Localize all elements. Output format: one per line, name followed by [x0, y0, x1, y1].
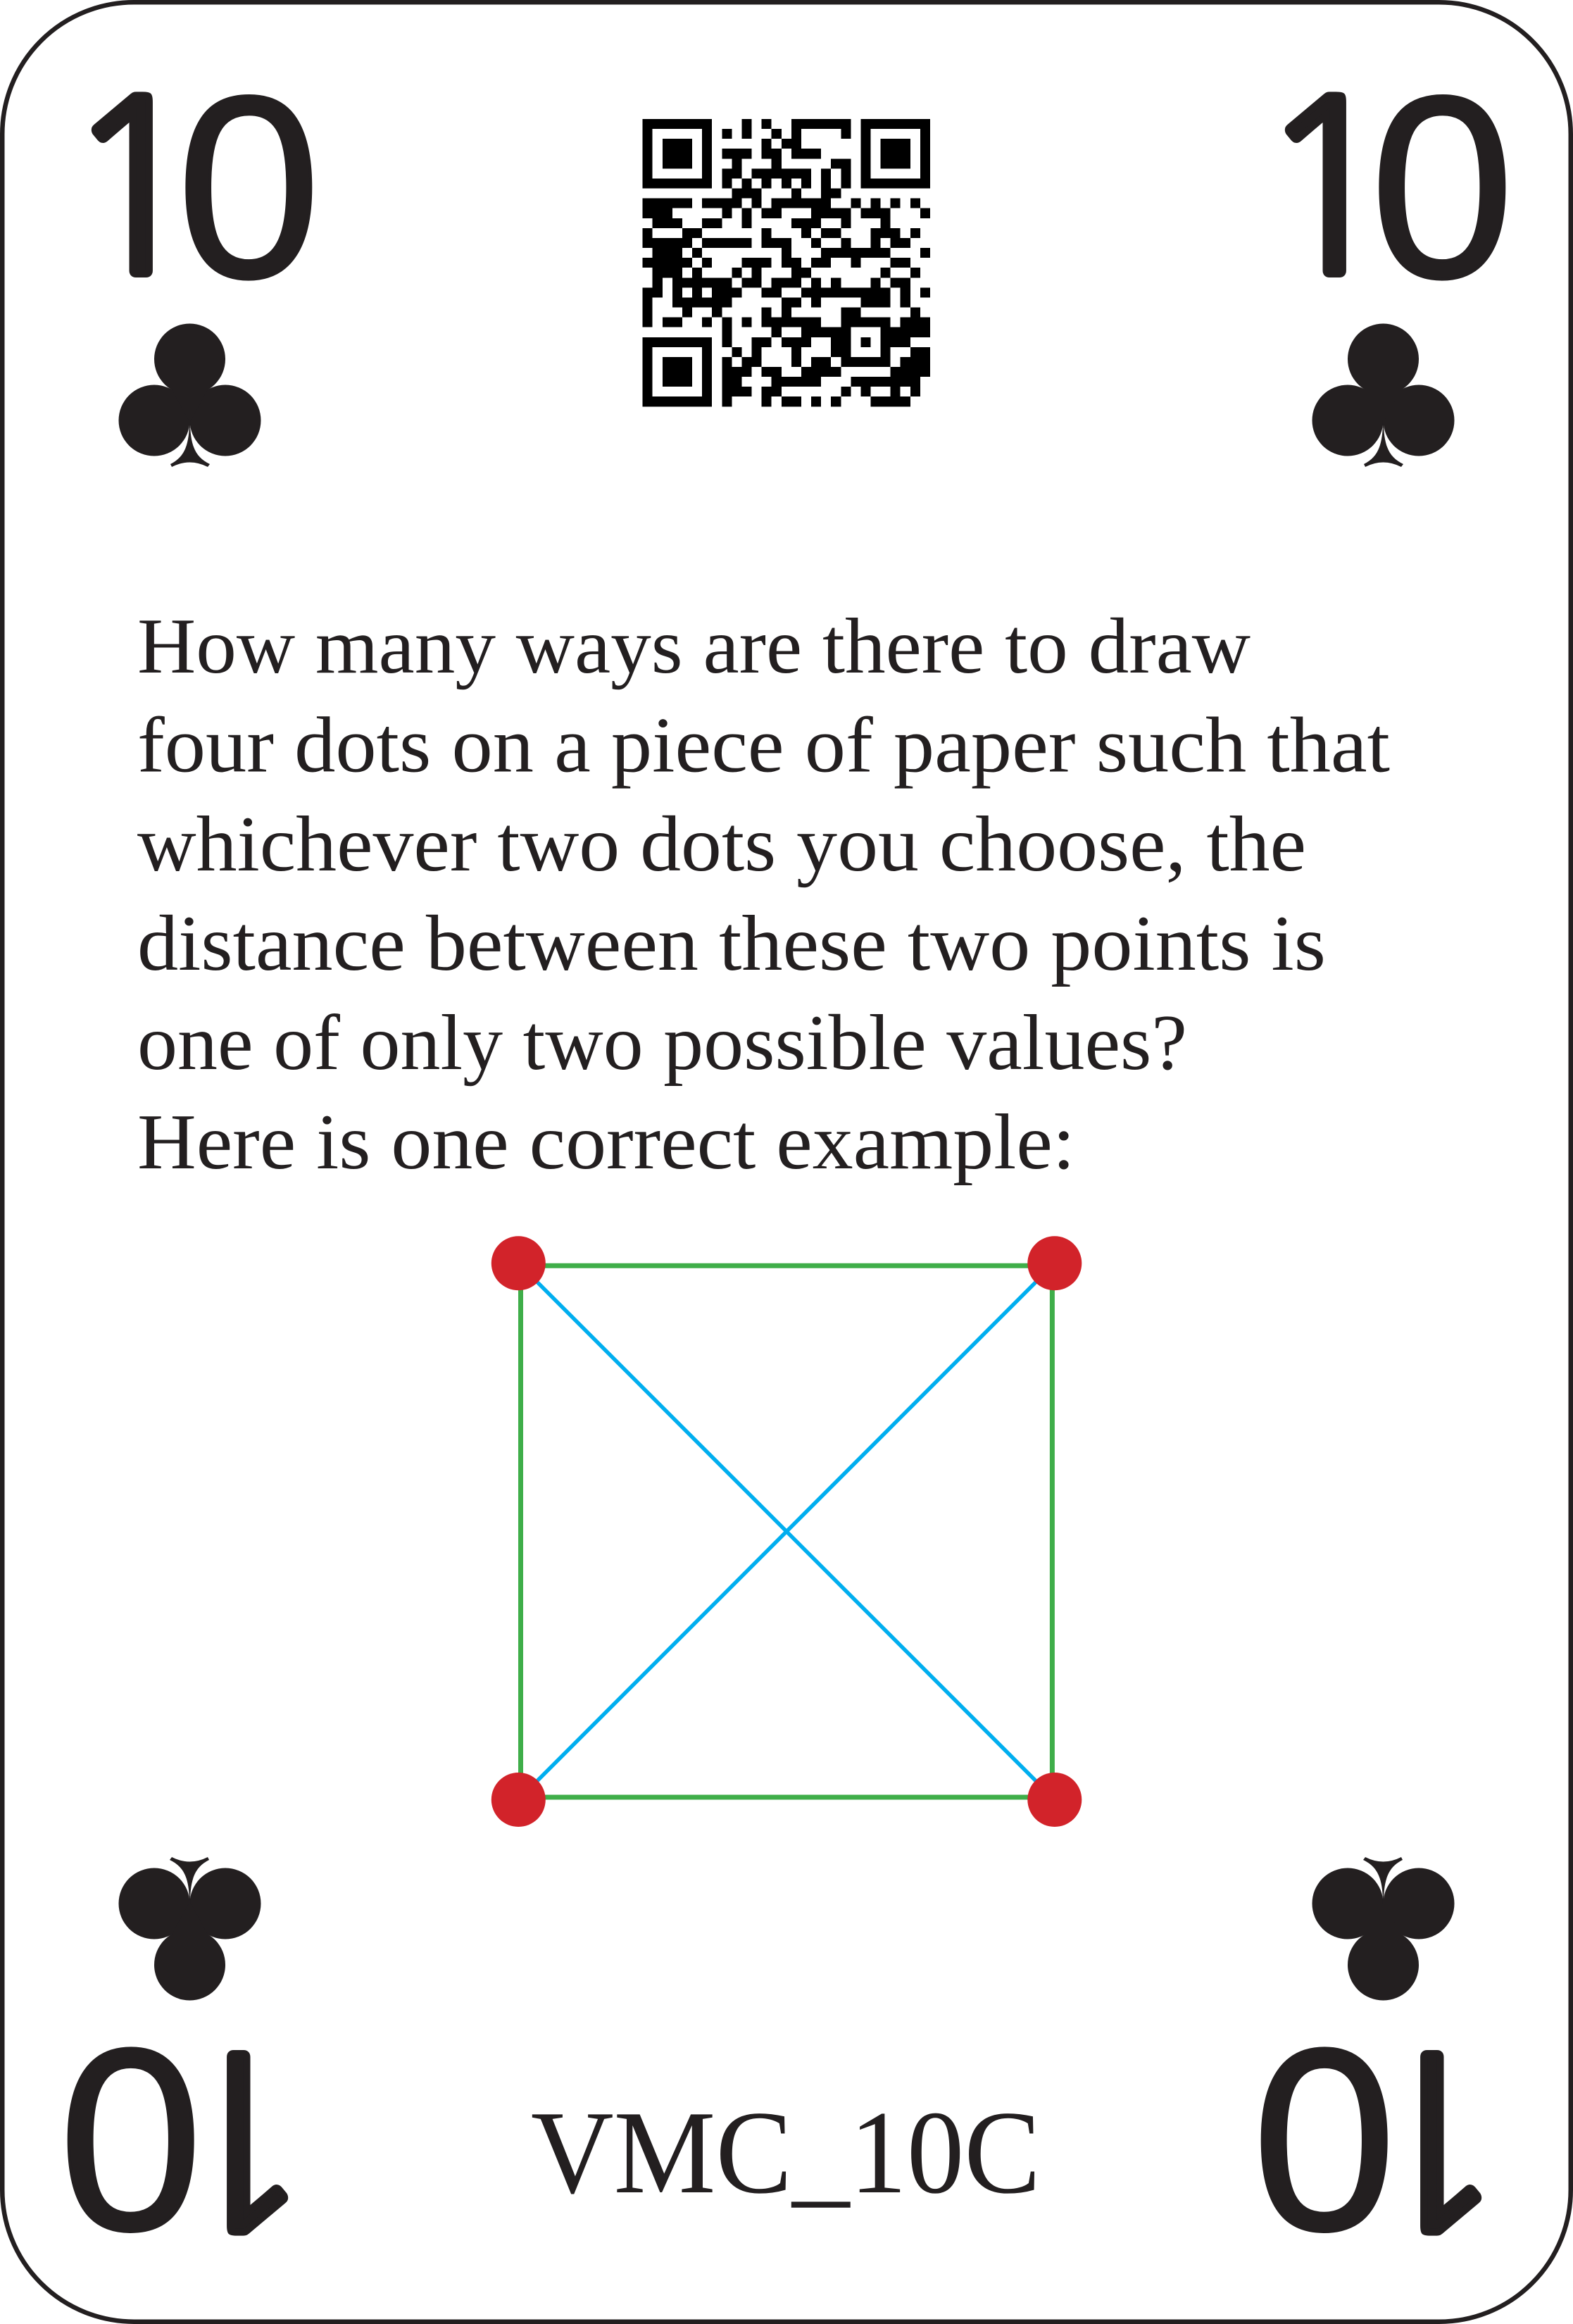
rank: 10: 0	[177, 42, 321, 332]
icon: club upside down	[1312, 1857, 1455, 2000]
corner: top-right rank and suit	[1255, 42, 1515, 467]
diagram: four dots example	[491, 1236, 1082, 1827]
text block: puzzle question: whichever two dots you choose, the	[137, 801, 1306, 888]
text block: puzzle question: How many ways are there to draw	[137, 603, 1251, 690]
text block: puzzle question: four dots on a piece of paper such that	[137, 701, 1390, 789]
icon: club	[118, 324, 261, 467]
rank: 10 upside down: 1	[1367, 2020, 1512, 2259]
text block: puzzle question: distance between these two points is	[137, 900, 1326, 987]
corner: bottom-left rank and suit, rotated	[58, 1857, 318, 2285]
card code label: VMC_10C	[531, 2086, 1041, 2218]
red dots	[491, 1236, 1082, 1827]
rank: 10 upside down: 0	[58, 1996, 203, 2285]
icon: QR code	[643, 119, 930, 406]
blue diagonals	[518, 1263, 1055, 1800]
corner: top-left rank and suit	[61, 42, 321, 467]
text block: puzzle question: one of only two possible values?	[137, 999, 1187, 1087]
icon: club	[1312, 324, 1455, 467]
rank: 10 upside down: 1	[173, 2020, 318, 2259]
icon: club upside down	[118, 1857, 261, 2000]
rank: 10: 1	[1255, 68, 1400, 308]
green square edges	[518, 1266, 1055, 1797]
rank: 10: 0	[1370, 42, 1515, 332]
rank: 10: 1	[61, 68, 206, 308]
text block: puzzle question: Here is one correct example:	[137, 1099, 1075, 1186]
text block: puzzle question	[137, 603, 1390, 1186]
rank: 10 upside down: 0	[1252, 1996, 1396, 2285]
corner: bottom-right rank and suit, rotated	[1252, 1857, 1512, 2285]
